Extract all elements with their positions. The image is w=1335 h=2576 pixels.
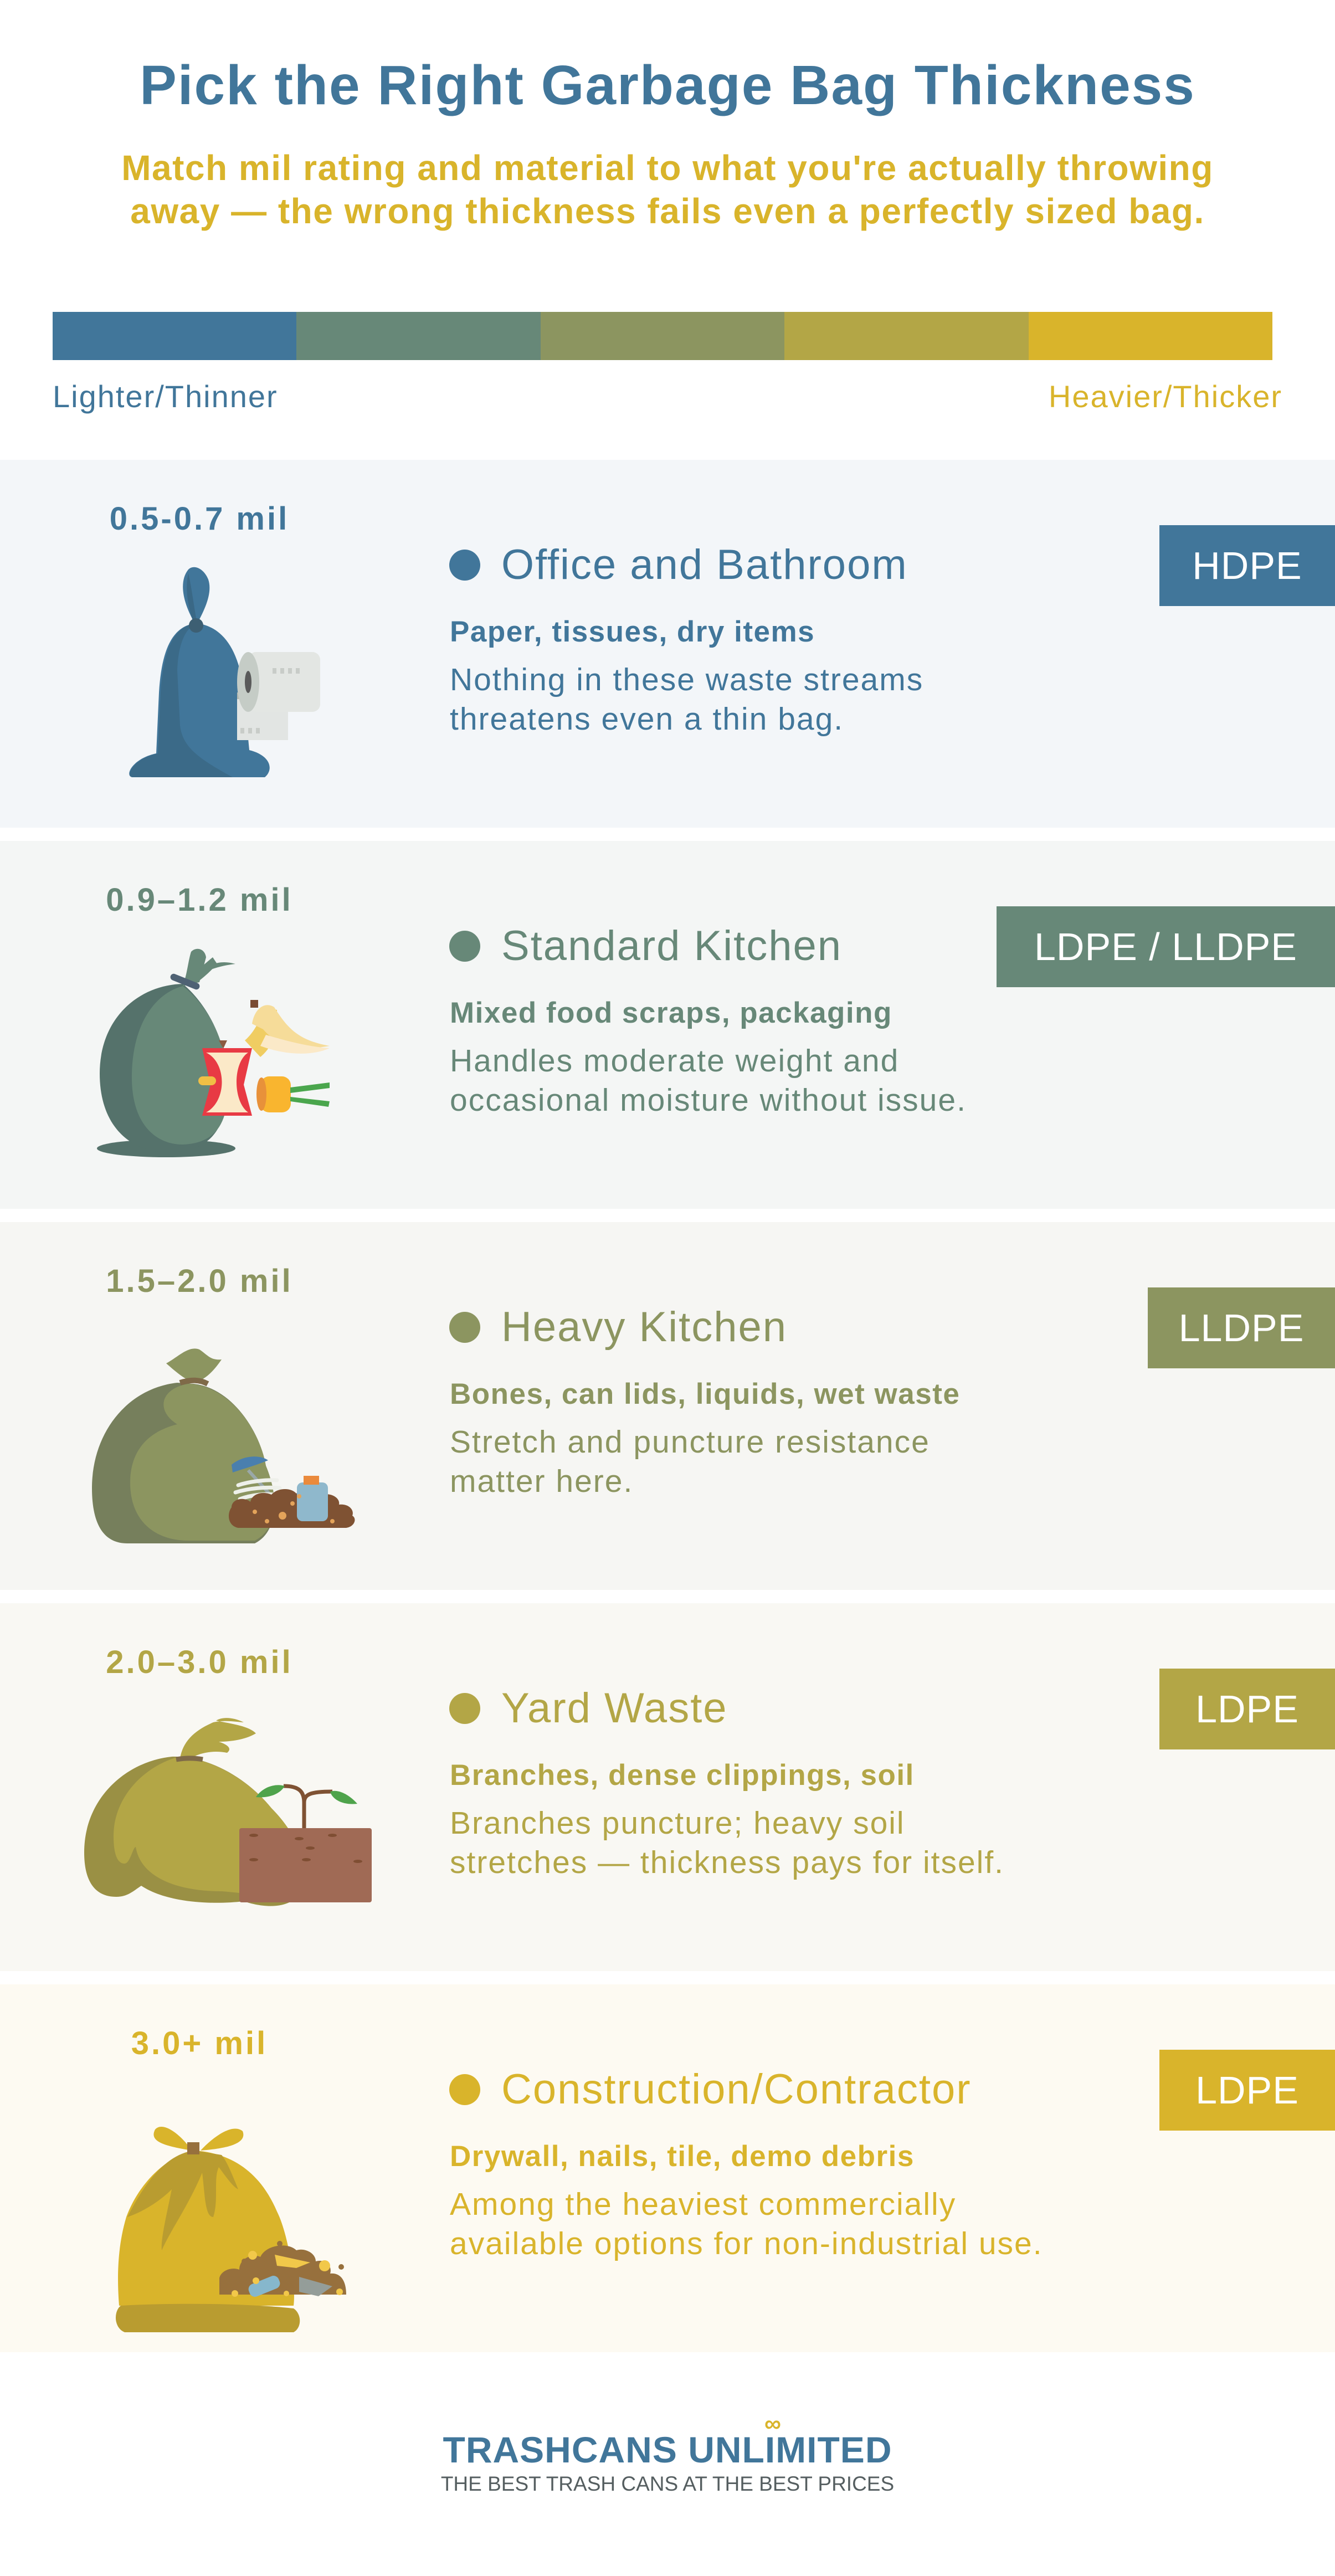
- description: Branches puncture; heavy soil: [450, 1805, 905, 1841]
- brand name: TRASHCANS UNLIMITED: [443, 2429, 892, 2470]
- mil label: 0.9–1.2 mil: [106, 882, 293, 918]
- subtitle: [121, 148, 1214, 231]
- material badge: LDPE: [1195, 1687, 1299, 1731]
- description: threatens even a thin bag.: [450, 701, 844, 737]
- mil label: 3.0+ mil: [131, 2025, 268, 2061]
- category title: Standard Kitchen: [501, 922, 842, 969]
- icon: green bag with food scraps: [97, 948, 330, 1157]
- panel: yard waste: [0, 1603, 1335, 1971]
- category title: Construction/Contractor: [501, 2066, 972, 2113]
- icon: yellow bag with debris: [115, 2127, 346, 2332]
- subtitle: away — the wrong thickness fails even a perfectly sized bag.: [130, 191, 1205, 231]
- panel: construction/contractor: [0, 1984, 1335, 2352]
- material badge: HDPE: [1192, 544, 1302, 587]
- material badge: [1159, 1669, 1335, 1749]
- material badge: [1148, 1287, 1335, 1368]
- category title: Office and Bathroom: [501, 541, 908, 588]
- waste items: Mixed food scraps, packaging: [450, 997, 892, 1029]
- waste items: Branches, dense clippings, soil: [450, 1759, 915, 1792]
- waste items: Bones, can lids, liquids, wet waste: [450, 1378, 960, 1410]
- subtitle: Match mil rating and material to what you're actually throwing: [121, 148, 1214, 188]
- scale label: heavier: Heavier/Thicker: [1049, 379, 1282, 414]
- tagline: THE BEST TRASH CANS AT THE BEST PRICES: [441, 2472, 894, 2495]
- material badge: [1159, 2050, 1335, 2131]
- description: [450, 662, 923, 737]
- mil label: 1.5–2.0 mil: [106, 1263, 293, 1299]
- title: Pick the Right Garbage Bag Thickness: [140, 54, 1195, 116]
- category title: Heavy Kitchen: [501, 1304, 787, 1351]
- description: [450, 1805, 1004, 1880]
- description: occasional moisture without issue.: [450, 1082, 967, 1118]
- description: Among the heaviest commercially: [450, 2187, 956, 2222]
- category dot: [449, 1693, 480, 1724]
- category dot: [449, 2074, 480, 2105]
- description: Handles moderate weight and: [450, 1043, 899, 1079]
- material badge: [997, 906, 1335, 987]
- mil label: 2.0–3.0 mil: [106, 1644, 293, 1680]
- description: [450, 2187, 1043, 2261]
- material badge: LLDPE: [1179, 1306, 1304, 1349]
- material badge: LDPE: [1195, 2069, 1299, 2112]
- thickness scale bar: [53, 312, 1272, 360]
- material badge: [1159, 525, 1335, 606]
- waste items: Paper, tissues, dry items: [450, 615, 815, 648]
- category dot: [449, 931, 480, 962]
- description: matter here.: [450, 1464, 633, 1499]
- icon: blue bag with toilet paper: [129, 567, 320, 777]
- description: stretches — thickness pays for itself.: [450, 1845, 1004, 1880]
- category title: Yard Waste: [501, 1685, 728, 1732]
- panel: heavy kitchen: [0, 1222, 1335, 1590]
- description: [450, 1043, 967, 1118]
- description: Stretch and puncture resistance: [450, 1424, 930, 1460]
- category dot: [449, 550, 480, 581]
- icon: infinity: ∞: [764, 2410, 781, 2436]
- mil label: 0.5-0.7 mil: [110, 501, 289, 537]
- panel: standard kitchen: [0, 841, 1335, 1209]
- scale label: lighter: Lighter/Thinner: [53, 379, 278, 414]
- description: available options for non-industrial use.: [450, 2226, 1043, 2261]
- description: Nothing in these waste streams: [450, 662, 923, 697]
- category dot: [449, 1312, 480, 1343]
- waste items: Drywall, nails, tile, demo debris: [450, 2140, 915, 2173]
- description: [450, 1424, 930, 1499]
- panel: office and bathroom: [0, 460, 1335, 828]
- footer logo: [441, 2410, 894, 2495]
- icon: yellow-green bag with soil and sprout: [84, 1718, 372, 1906]
- icon: olive bag with wet waste: [92, 1348, 355, 1543]
- material badge: LDPE / LLDPE: [1034, 925, 1297, 968]
